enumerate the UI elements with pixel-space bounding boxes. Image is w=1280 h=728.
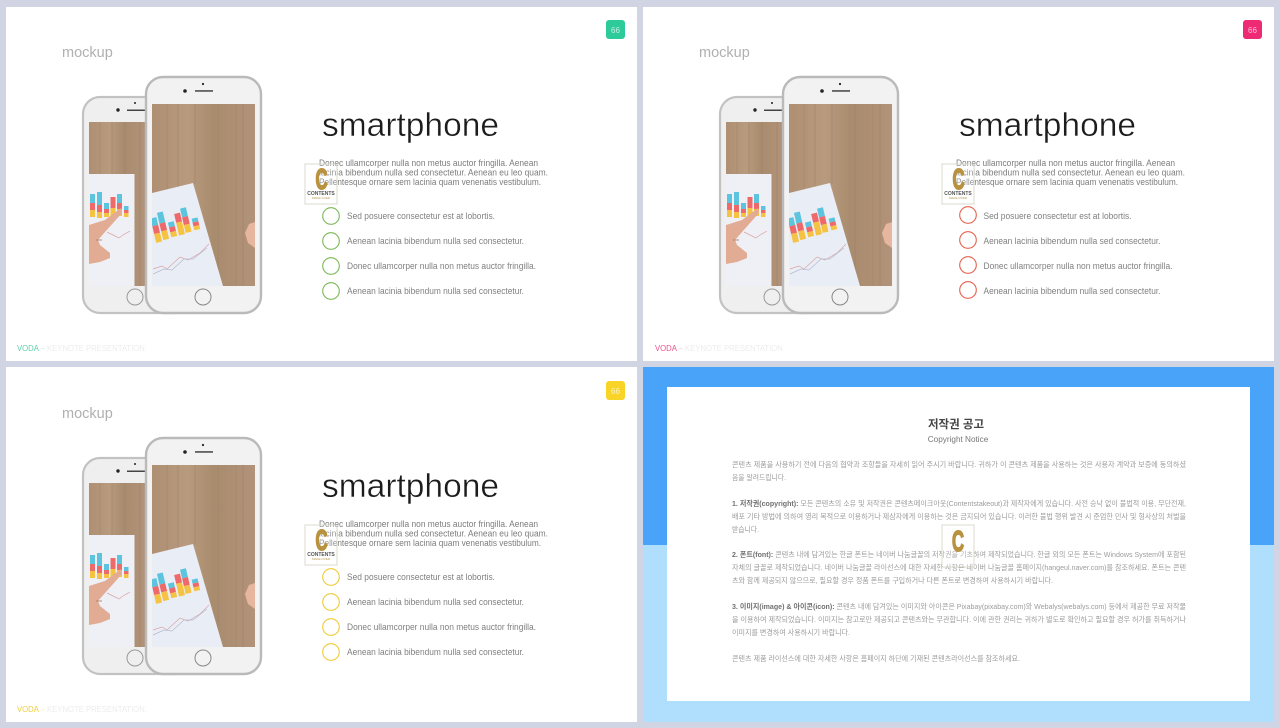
footer: VODA – KEYNOTE PRESENTATION. [655, 344, 785, 353]
notice body text: 이미지를 변경하여 사용하시기 바랍니다. [732, 628, 850, 637]
notice body text: 받습니다. [732, 525, 759, 534]
checklist [960, 207, 1172, 298]
page badge [1243, 20, 1262, 39]
notice body text: 자체의 글꼴로 제작되었습니다. 네이버 나눔글꼴 라이선스에 대한 자세한 사항은 네이버 나눔글꼴 홈페이지(hangeul.naver.com)를 참조하세요. 폰트는 콘텐 [732, 563, 1186, 572]
footer: VODA – KEYNOTE PRESENTATION. [17, 705, 147, 714]
checklist: Aenean lacinia bibendum nulla sed consectetur. [347, 286, 524, 296]
page badge [606, 381, 625, 400]
panel: copyright notice [643, 367, 1274, 722]
watermark: C [952, 526, 964, 558]
section label: mockup [62, 406, 113, 422]
heading: smartphone [322, 107, 499, 144]
checklist [323, 208, 536, 299]
notice body text: 2. 폰트(font): 콘텐츠 내에 담겨있는 한글 폰트는 네이버 나눔글꼴의 저작권을 기초하여 제작되었습니다. 한글 외의 모든 폰트는 Windows System에 포함된 [732, 550, 1186, 559]
watermark [305, 525, 337, 565]
notice body text: 3. 이미지(image) & 아이콘(icon): 콘텐츠 내에 담겨있는 이미지와 아이콘은 Pixabay(pixabay.com)와 Webalys(webalys.com) 등에서 제공한 무료 저작물 [732, 602, 1186, 611]
watermark [942, 525, 974, 567]
body text: Donec ullamcorper nulla non metus auctor fringilla. Aenean [319, 519, 538, 529]
body text: lacinia bibendum nulla sed consectetur. Aenean eu leo quam. [956, 168, 1185, 178]
panel: green slide [6, 7, 637, 361]
section label: mockup [699, 45, 750, 61]
page badge: 66 [1248, 26, 1257, 35]
section label: mockup [62, 45, 113, 61]
body text: Pellentesque ornare sem lacinia quam venenatis vestibulum. [319, 177, 541, 187]
body text [956, 158, 1185, 187]
notice subtitle: Copyright Notice [928, 435, 989, 444]
notice body text: 배포 기타 방법에 의하여 영리 목적으로 이용하거나 제삼자에게 이용하는 것은 금지되어 있습니다. 이러한 불법 행위 발견 시 준엄한 민사 및 형사상의 처벌을 [732, 512, 1186, 521]
checklist [323, 569, 536, 660]
body text: Donec ullamcorper nulla non metus auctor fringilla. Aenean [956, 158, 1175, 168]
checklist: Aenean lacinia bibendum nulla sed consectetur. [984, 236, 1160, 246]
body text: Donec ullamcorper nulla non metus auctor fringilla. Aenean [319, 158, 538, 168]
phone mockup [83, 438, 261, 674]
checklist: Donec ullamcorper nulla non metus auctor fringilla. [984, 261, 1172, 271]
notice body text: 콘텐츠 제품을 사용하기 전에 다음의 협약과 조항들을 자세히 읽어 주시기 바랍니다. 귀하가 이 콘텐츠 제품을 사용하는 것은 사용자 계약과 보증에 동의하셨 [732, 460, 1186, 469]
body text: lacinia bibendum nulla sed consectetur. Aenean eu leo quam. [319, 528, 548, 538]
watermark [305, 164, 337, 204]
checklist: Aenean lacinia bibendum nulla sed consectetur. [984, 286, 1160, 296]
notice body text: 1. 저작권(copyright): 모든 콘텐츠의 소유 및 저작권은 콘텐츠메이크아웃(Contentstakeout)과 제작자에게 있습니다. 사전 승낙 없이 불법적 이용, 무단전재, [732, 499, 1186, 508]
phone mockup [720, 77, 898, 313]
notice body text: 콘텐츠 제품 라이선스에 대한 자세한 사항은 홈페이지 하단에 기재된 콘텐츠라이선스를 참조하세요. [732, 654, 1020, 663]
checklist: Aenean lacinia bibendum nulla sed consectetur. [347, 236, 524, 246]
body text: Pellentesque ornare sem lacinia quam venenatis vestibulum. [956, 177, 1178, 187]
checklist: Sed posuere consectetur est at lobortis. [347, 211, 495, 221]
body text: lacinia bibendum nulla sed consectetur. Aenean eu leo quam. [319, 168, 548, 178]
checklist: Aenean lacinia bibendum nulla sed consectetur. [347, 597, 524, 607]
page badge: 66 [611, 26, 620, 35]
notice title: 저작권 공고 [928, 417, 984, 431]
notice body text: 음을 알려드립니다. [732, 473, 786, 482]
checklist: Sed posuere consectetur est at lobortis. [984, 211, 1132, 221]
page badge: 66 [611, 387, 620, 396]
heading: smartphone [322, 468, 499, 505]
panel: pink slide [643, 7, 1274, 361]
checklist: Donec ullamcorper nulla non metus auctor fringilla. [347, 622, 536, 632]
checklist: Sed posuere consectetur est at lobortis. [347, 572, 495, 582]
checklist: Aenean lacinia bibendum nulla sed consectetur. [347, 647, 524, 657]
heading: smartphone [959, 107, 1136, 144]
watermark [942, 164, 974, 204]
page badge [606, 20, 625, 39]
body text [319, 519, 548, 548]
notice body text [732, 460, 1186, 663]
notice body text: 츠와 함께 제공되지 않으므로, 필요할 경우 정품 폰트를 구입하거나 다른 폰트로 변경하여 사용하시기 바랍니다. [732, 576, 1053, 585]
notice body text: 을 이용하여 제작되었습니다. 이미지는 참고로만 제공되고 콘텐츠와는 무관합니다. 이에 관한 권리는 귀하가 별도로 확인하고 필요할 경우 허가를 취득하거나 [732, 615, 1186, 624]
panel: yellow slide [6, 367, 637, 722]
checklist: Donec ullamcorper nulla non metus auctor fringilla. [347, 261, 536, 271]
body text: Pellentesque ornare sem lacinia quam venenatis vestibulum. [319, 538, 541, 548]
body text [319, 158, 548, 187]
phone mockup [83, 77, 261, 313]
footer: VODA – KEYNOTE PRESENTATION. [17, 344, 147, 353]
